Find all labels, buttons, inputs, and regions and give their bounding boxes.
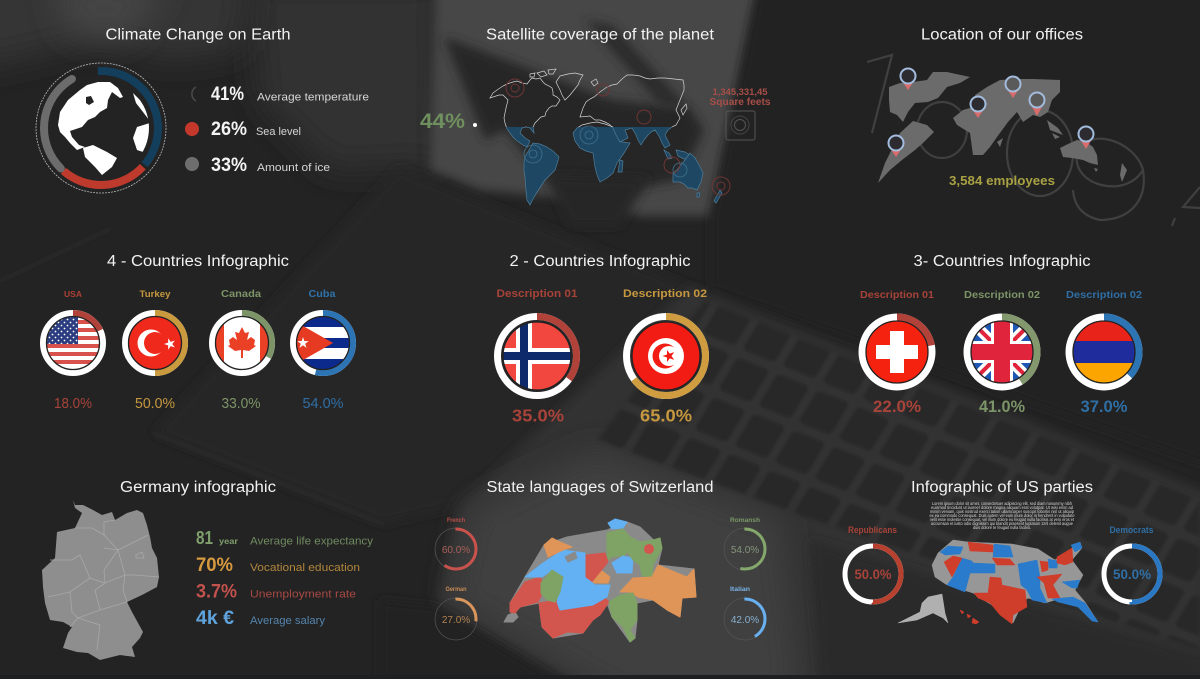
title: Germany: Germany infographic — [120, 479, 276, 496]
stat: vocational education — [196, 555, 360, 576]
legend: amount of ice — [185, 155, 330, 176]
gauge: Italian: 42.0% — [731, 615, 759, 626]
flag: Armenia: Description 02 — [1066, 289, 1142, 301]
lorem paragraph: Lorem ipsum dolor sit amet, consectetuer adipiscing elit, sed diam nonummy nibh — [932, 501, 1073, 506]
handwritten numerals — [867, 55, 1200, 226]
flag: USA: 18.0% — [54, 396, 92, 412]
stat: life expectancy — [196, 528, 374, 548]
lorem paragraph: ex ea commodo consequat. Duis autem vel eum iriure dolor in hendrerit in vulputate — [930, 513, 1075, 518]
stat: square feet: 1,345,331,45 — [712, 87, 768, 98]
gauge: Italian: Italian — [730, 587, 750, 593]
flag: Canada: 33.0% — [222, 396, 261, 412]
title: 3 countries: 3- Countries Infographic — [914, 253, 1091, 270]
title: satellite: Satellite coverage of the planet — [486, 26, 715, 44]
legend: sea level: 26% — [211, 119, 247, 140]
flag: Tunisia: 65.0% — [640, 406, 692, 426]
lorem paragraph: minim veniam, quis nostrud exerci tation ullamcorper suscipit lobortis nisl ut aliquip — [930, 509, 1075, 514]
stat: average salary: Average salary — [250, 615, 326, 627]
title: 2 countries: 2 - Countries Infographic — [510, 253, 691, 270]
panel: 4 countries — [43, 253, 353, 412]
flag: Norway: Description 01 — [496, 288, 578, 300]
lorem paragraph: velit esse molestie consequat, vel illum dolore eu feugiat nulla facilisis at vero eros et — [930, 517, 1075, 522]
gauge: Republicans — [845, 525, 901, 602]
stat: vocational education: Vocational education — [250, 562, 360, 574]
gauge: German: German — [446, 587, 467, 593]
gauge: Italian — [724, 587, 766, 640]
title: Switzerland: State languages of Switzerland — [486, 479, 714, 496]
flag: Norway: 35.0% — [512, 406, 564, 426]
stat: unemployment rate — [196, 582, 356, 602]
panel: US parties — [845, 479, 1160, 624]
legend: sea level — [185, 119, 301, 140]
flag: Turkey: 50.0% — [135, 396, 175, 412]
gauge: French: 60.0% — [442, 545, 470, 556]
office pins — [888, 68, 1094, 157]
lorem paragraph: accumsan et iusto odio dignissim qui blandit praesent luptatum zzril delenit augue — [931, 521, 1074, 526]
map: Germany — [42, 500, 159, 660]
lorem paragraph: euismod tincidunt ut laoreet dolore magna aliquam erat volutpat. Ut wisi enim ad — [931, 505, 1074, 510]
flag: United Kingdom: Description 02 — [964, 289, 1040, 301]
panel: Germany — [42, 479, 374, 660]
flag: Armenia — [1066, 289, 1142, 416]
flag: Norway — [496, 288, 578, 426]
gauge: German: 27.0% — [442, 615, 470, 626]
legend: sea level: Sea level — [256, 126, 301, 138]
map: Switzerland cantons — [504, 519, 696, 642]
title: 4 countries: 4 - Countries Infographic — [107, 253, 289, 270]
flag: United Kingdom: 41.0% — [979, 397, 1025, 416]
flag: Cuba: 54.0% — [302, 396, 344, 412]
lorem paragraph — [930, 501, 1075, 530]
gauge: Democrats: 50.0% — [1113, 566, 1152, 582]
panel: 3 countries — [860, 253, 1142, 416]
flag: Tunisia: Description 02 — [623, 288, 707, 300]
stat: life expectancy: year — [219, 537, 238, 546]
map: United States — [898, 540, 1098, 624]
globe donut chart — [36, 62, 166, 194]
gauge: Republicans: 50.0% — [854, 566, 892, 582]
lorem paragraph: duis dolore te feugait nulla facilisi. — [973, 525, 1031, 530]
map markers — [506, 79, 730, 195]
title: offices: Location of our offices — [921, 26, 1083, 44]
gauge: French — [435, 518, 477, 570]
stat: unemployment rate: Unemployment rate — [250, 588, 356, 600]
stat: vocational education: 70% — [196, 555, 233, 576]
stat: 44 percent: 44% — [420, 110, 465, 133]
panel: satellite coverage — [420, 26, 771, 205]
icon: globe continents — [58, 82, 151, 175]
gauge: Democrats: Democrats — [1110, 525, 1154, 536]
flag: Switzerland: 22.0% — [873, 397, 921, 416]
gauge: Romansh: 54.0% — [731, 545, 759, 556]
marker dot — [473, 123, 477, 127]
gauge: French: French — [447, 518, 465, 524]
stat: average salary: 4k € — [196, 608, 234, 629]
flag: Turkey — [125, 289, 185, 412]
world map gray — [878, 72, 1127, 183]
legend: average temperature — [192, 84, 369, 105]
stat: employees: 3,584 employees — [949, 174, 1055, 188]
flag: USA: USA — [64, 289, 82, 299]
title: US parties: Infographic of US parties — [911, 479, 1093, 496]
panel: climate change on earth — [36, 28, 368, 194]
flag: USA — [43, 289, 103, 412]
legend: amount of ice: Amount of ice — [257, 162, 330, 174]
gauge: Romansh: Romansh — [730, 518, 760, 524]
flag: Armenia: 37.0% — [1080, 397, 1128, 416]
gauge: German — [435, 587, 477, 640]
gauge: Republicans: Republicans — [848, 525, 897, 536]
flag: Cuba — [293, 289, 353, 412]
panel: location of offices — [867, 26, 1200, 226]
legend: average temperature: 41% — [211, 84, 244, 105]
panel: Switzerland — [435, 479, 766, 642]
flag: United Kingdom — [964, 289, 1040, 416]
flag: Turkey: Turkey — [140, 289, 170, 299]
flag: Cuba: Cuba — [308, 289, 336, 300]
stat: square feet: Square feets — [710, 97, 771, 108]
icon: target box — [726, 111, 755, 140]
legend: average temperature: Average temperature — [257, 92, 369, 104]
stat: life expectancy: 81 — [196, 528, 213, 548]
stat: unemployment rate: 3.7% — [196, 582, 237, 602]
flag: Switzerland: Description 01 — [860, 289, 934, 301]
flag: Canada — [212, 289, 272, 412]
stat: life expectancy: Average life expectancy — [250, 536, 374, 548]
gauge: Romansh — [724, 518, 766, 570]
flag: Tunisia — [623, 288, 707, 426]
legend: amount of ice: 33% — [211, 155, 247, 176]
stat: square feet — [710, 87, 771, 108]
flag: Canada: Canada — [221, 289, 261, 300]
gauge: Democrats — [1104, 525, 1160, 602]
world map with coverage — [490, 69, 730, 205]
flag: Switzerland — [860, 289, 934, 416]
stat: average salary — [196, 608, 326, 629]
title: climate: Climate Change on Earth — [106, 26, 290, 44]
panel: 2 countries — [496, 253, 707, 426]
